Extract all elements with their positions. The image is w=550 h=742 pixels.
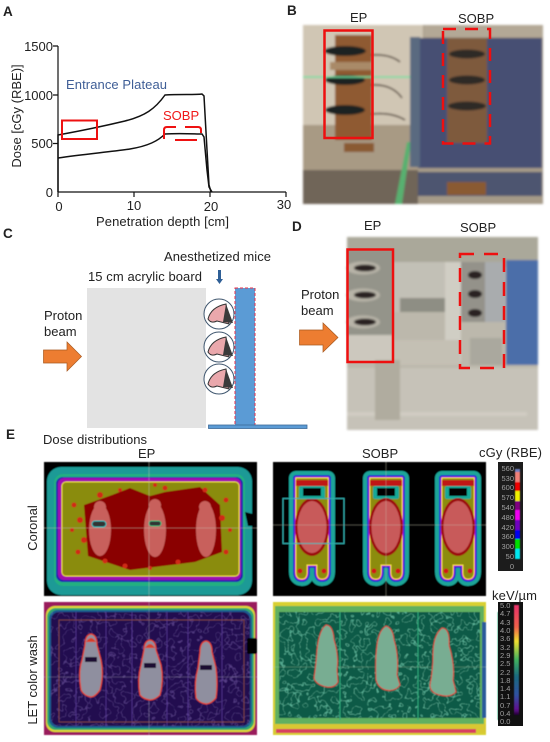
keV legend color bar: [514, 605, 519, 715]
x axis tick labels: [55, 197, 291, 214]
cGy legend values: 570: [501, 493, 514, 502]
proton beam label: Proton: [301, 287, 339, 302]
panel label A: A: [3, 4, 13, 19]
x axis title: Penetration depth [cm]: [96, 214, 229, 229]
panel label D: D: [292, 219, 302, 234]
cGy legend values: [501, 464, 514, 571]
x axis tick labels: 30: [277, 197, 291, 212]
acrylic board: [87, 288, 206, 428]
panel E: dose distributions and LET: [25, 432, 542, 735]
EP column heading: EP: [138, 446, 155, 461]
keV legend values: [500, 601, 510, 726]
keV legend values: 1.8: [500, 676, 510, 685]
EP coronal dose map: [44, 462, 257, 596]
cGy legend values: 300: [501, 542, 514, 551]
x axis tick labels: 20: [204, 199, 218, 214]
cGy color legend: [498, 462, 523, 571]
panel label B: B: [287, 3, 297, 18]
cGy legend values: 530: [501, 474, 514, 483]
y axis tick labels: [24, 39, 53, 200]
EP red box: [324, 30, 372, 138]
y axis tick labels: 0: [46, 185, 53, 200]
keV color legend: [498, 601, 523, 726]
keV legend values: 2.2: [500, 668, 510, 677]
panel B: photo of mice setup: [303, 10, 543, 204]
SOBP label: SOBP: [163, 108, 199, 123]
keV legend values: 5.0: [500, 601, 510, 610]
proton beam label: beam: [44, 324, 77, 339]
cGy legend color bar: [515, 469, 520, 559]
SOBP coronal dose map: [273, 462, 486, 596]
keV legend values: 3.2: [500, 643, 510, 652]
SOBP dose curve: [58, 134, 212, 192]
proton beam label: beam: [301, 303, 334, 318]
panel D: photo of setup from side: [300, 218, 538, 430]
dose distributions heading: Dose distributions: [43, 432, 148, 447]
red box: entrance plateau region: [62, 120, 97, 139]
keV legend title: keV/µm: [492, 588, 537, 603]
keV legend values: 2.9: [500, 651, 510, 660]
SOBP heading: SOBP: [460, 220, 496, 235]
keV legend values: 2.5: [500, 659, 510, 668]
cGy legend values: 600: [501, 483, 514, 492]
cGy legend title: cGy (RBE): [479, 445, 542, 460]
keV legend values: 0.0: [500, 717, 510, 726]
cGy legend values: 480: [501, 513, 514, 522]
keV legend values: 3.6: [500, 634, 510, 643]
cGy legend values: 540: [501, 503, 514, 512]
cGy legend values: 360: [501, 532, 514, 541]
blue phantom column: [235, 288, 255, 426]
panel label E: E: [6, 427, 15, 442]
chart axes: [53, 46, 286, 197]
panel label C: C: [3, 226, 13, 241]
SOBP heading: SOBP: [458, 11, 494, 26]
photo: [303, 25, 543, 204]
keV legend values: 4.7: [500, 609, 510, 618]
EP LET color wash map: [44, 602, 257, 735]
SOBP red dashed box: [460, 254, 504, 368]
coronal row label: Coronal: [25, 505, 40, 551]
base plate: [208, 425, 307, 428]
photo: [346, 237, 538, 430]
keV legend values: 0.4: [500, 709, 510, 718]
keV legend values: 4.3: [500, 618, 510, 627]
proton beam arrow: [44, 342, 82, 371]
keV legend values: 1.4: [500, 684, 510, 693]
LET row label: LET color wash: [25, 635, 40, 725]
EP heading: EP: [350, 10, 367, 25]
cGy legend values: 420: [501, 523, 514, 532]
y axis title: Dose [cGy (RBE)]: [9, 64, 24, 168]
panel C: schematic: [44, 249, 307, 428]
keV legend values: 0.7: [500, 701, 510, 710]
mouse icons: [204, 299, 234, 394]
entrance plateau dose curve: [58, 94, 211, 192]
EP red box: [348, 250, 393, 362]
cGy legend values: 50: [506, 552, 514, 561]
keV legend values: 4.0: [500, 626, 510, 635]
cGy legend values: 560: [501, 464, 514, 473]
acrylic board label: 15 cm acrylic board: [88, 269, 202, 284]
proton beam arrow: [300, 323, 338, 352]
red dashed box: SOBP region: [164, 127, 201, 140]
SOBP LET color wash map: [273, 602, 498, 735]
SOBP red dashed box: [443, 29, 490, 144]
cGy legend values: 0: [510, 562, 514, 571]
x axis tick labels: 10: [127, 198, 141, 213]
entrance plateau label: Entrance Plateau: [66, 77, 167, 92]
y axis tick labels: 1500: [24, 39, 53, 54]
SOBP column heading: SOBP: [362, 446, 398, 461]
EP heading: EP: [364, 218, 381, 233]
anesthetized mice label: Anesthetized mice: [164, 249, 271, 264]
panel A: dose depth chart: [9, 39, 291, 229]
proton beam label: Proton: [44, 308, 82, 323]
y axis tick labels: 1000: [24, 88, 53, 103]
x axis tick labels: 0: [55, 199, 63, 214]
y axis tick labels: 500: [31, 136, 53, 151]
keV legend values: 1.1: [500, 692, 510, 701]
arrow down to mice: [216, 270, 223, 284]
